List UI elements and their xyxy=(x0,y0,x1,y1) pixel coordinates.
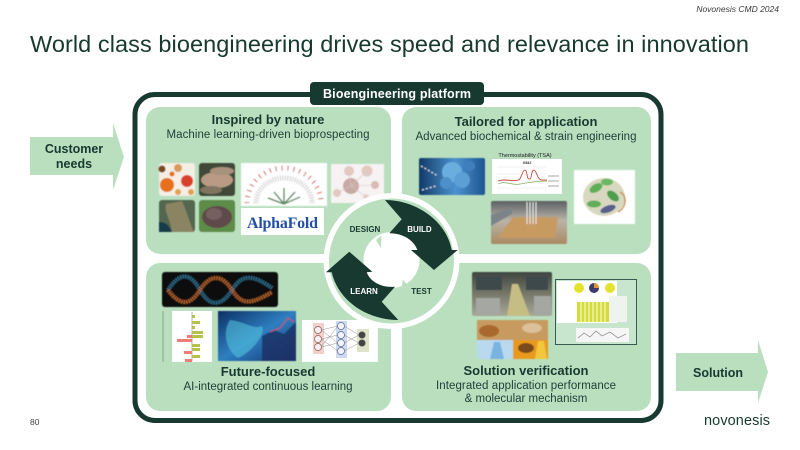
heading: Future-focused xyxy=(221,364,315,379)
label: test: TEST xyxy=(411,287,432,296)
chart: diverging bars xyxy=(172,311,212,362)
photo: soil xyxy=(199,200,235,232)
label: learn: LEARN xyxy=(350,287,378,296)
photo: mushrooms xyxy=(199,163,235,196)
chart: dashboard xyxy=(556,280,636,344)
arrow: build xyxy=(385,200,458,270)
chart caption: Thermostability (TSA) xyxy=(498,153,552,159)
label: build: BUILD xyxy=(407,225,432,234)
photo: AI data map xyxy=(218,311,296,361)
platform frame xyxy=(135,94,661,420)
logo: AlphaFold: AlphaFold xyxy=(247,215,318,232)
diagram: neural network xyxy=(302,320,378,362)
logo: novonesis: novonesis xyxy=(704,413,770,429)
heading: Inspired by nature xyxy=(212,112,324,127)
cycle diagram xyxy=(324,193,460,329)
photo: petri dishes xyxy=(158,163,195,196)
arrow: customer needs: Customer xyxy=(45,142,103,156)
photo: cliff xyxy=(159,200,195,232)
photo: DNA helix xyxy=(162,272,278,307)
subheading xyxy=(436,380,616,405)
arrow: learn xyxy=(326,252,398,320)
label: design: DESIGN xyxy=(350,225,381,234)
panel: tailored for application xyxy=(402,107,651,254)
image: protein structure xyxy=(574,170,635,224)
photo: lab robot xyxy=(491,201,567,244)
subheading: AI-integrated continuous learning xyxy=(184,381,352,393)
panel: inspired by nature xyxy=(146,107,391,254)
axis line xyxy=(162,311,164,362)
header note: Novonesis CMD 2024 xyxy=(696,4,779,14)
panel: solution verification xyxy=(402,263,651,411)
chart: thermostability: G842 xyxy=(523,161,531,165)
subheading: Advanced biochemical & strain engineering xyxy=(416,131,636,143)
heading: Solution verification xyxy=(464,363,589,378)
chart: network xyxy=(331,164,384,203)
chart: thermostability xyxy=(492,159,562,194)
arrow: solution xyxy=(676,340,768,403)
subheading: Machine learning-driven bioprospecting xyxy=(166,129,370,141)
platform label: Bioengineering platform xyxy=(323,87,471,101)
page number: 80 xyxy=(30,417,40,427)
heading: Tailored for application xyxy=(455,114,597,129)
photo: blue molecules xyxy=(419,158,485,195)
panel: future-focused xyxy=(146,263,391,411)
subheading: & molecular mechanism xyxy=(465,393,587,405)
arrow: solution: Solution xyxy=(693,366,743,380)
arrow: customer needs xyxy=(30,123,124,190)
subheading: Integrated application performance xyxy=(436,380,616,392)
title: World class bioengineering drives speed and relevance in innovation xyxy=(30,31,749,57)
logo: AlphaFold xyxy=(241,208,324,235)
chart: phylogenetic tree xyxy=(241,163,327,206)
arrow: customer needs: needs xyxy=(56,157,92,171)
photo: factory xyxy=(472,272,552,316)
photo: food and beverages xyxy=(477,320,548,359)
platform label xyxy=(310,82,484,105)
